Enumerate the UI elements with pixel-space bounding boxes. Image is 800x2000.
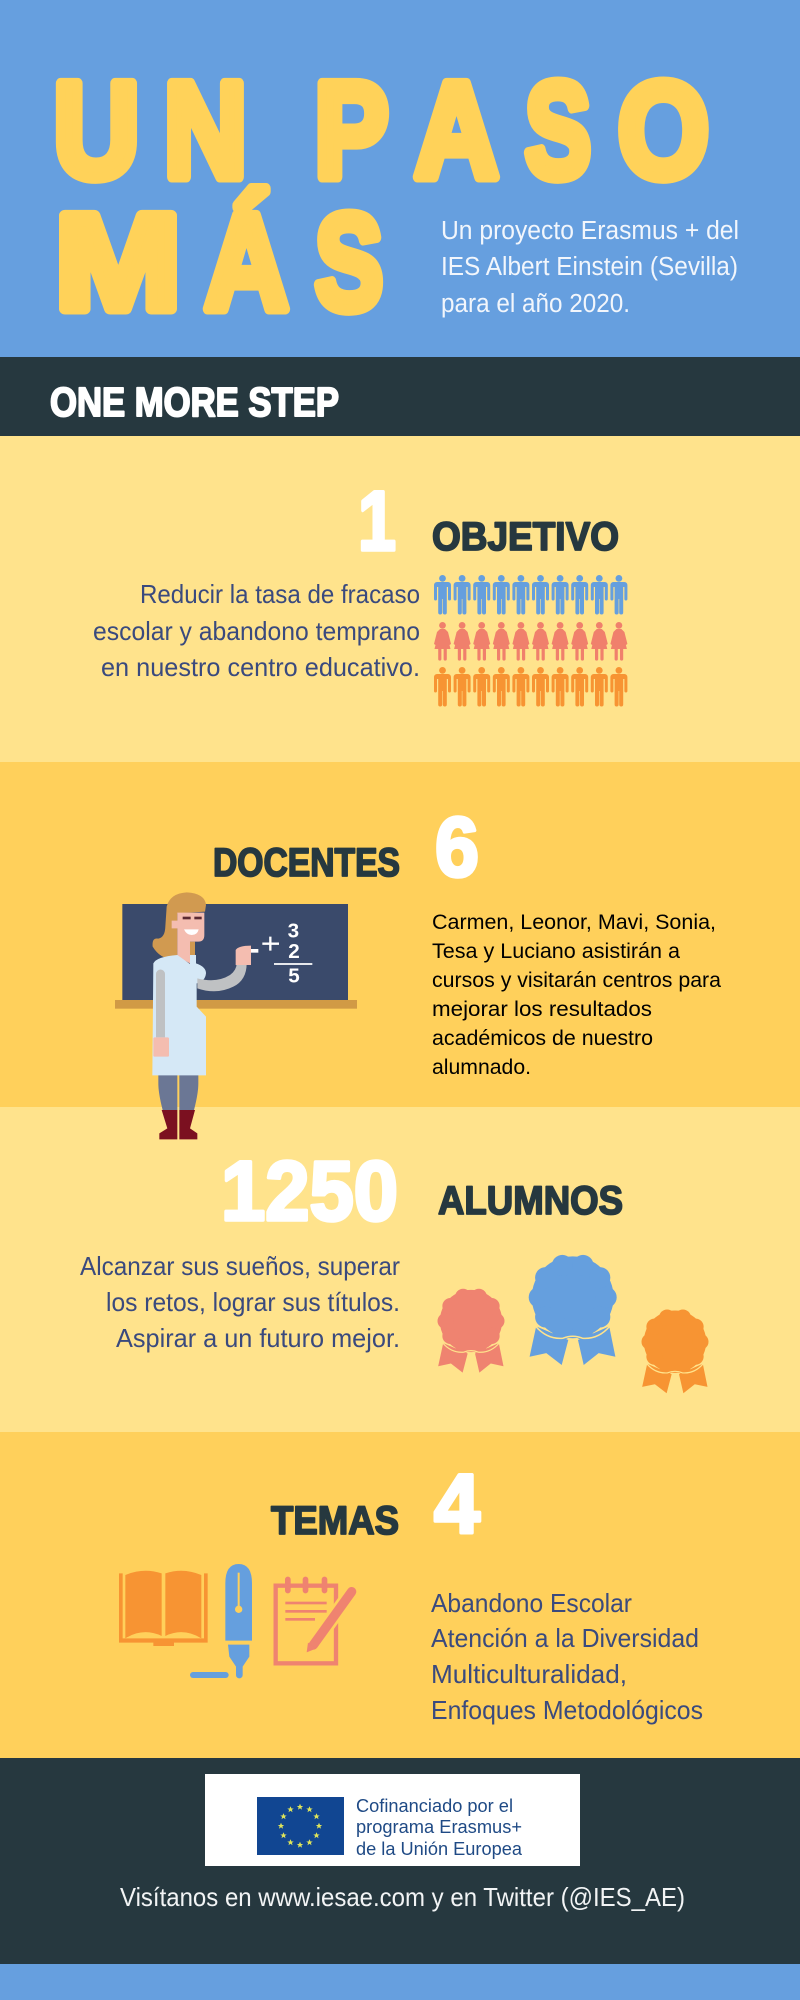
row of men: blue	[434, 575, 627, 614]
project description	[441, 217, 739, 318]
subtitle: one more step: ONE MORE STEP	[50, 379, 339, 425]
number 4: 4	[434, 1457, 480, 1551]
row of men: orange	[434, 667, 627, 706]
blackboard: 5	[288, 965, 300, 988]
temas list: Multiculturalidad,	[431, 1659, 627, 1689]
title: UN PASO MAS: N	[164, 54, 247, 206]
project description: para el año 2020.	[441, 290, 630, 318]
project description: Un proyecto Erasmus + del	[441, 217, 739, 245]
temas list: Abandono Escolar	[431, 1588, 632, 1618]
illustration: teacher at blackboard	[115, 892, 357, 1139]
temas list: Atención a la Diversidad	[431, 1623, 699, 1653]
docentes text: cursos y visitarán centros para	[432, 968, 721, 992]
panel: subtitle band	[0, 357, 800, 436]
icon: notepad and pencil	[276, 1577, 352, 1663]
temas list	[431, 1588, 703, 1725]
footer text: Visítanos en www.iesae.com y en Twitter (@IES_AE)	[120, 1882, 685, 1912]
blackboard	[115, 904, 357, 1009]
row of women: salmon	[434, 622, 627, 661]
objetivo text: Reducir la tasa de fracaso	[140, 579, 420, 609]
panel: docentes	[0, 762, 800, 1107]
heading: objetivo: OBJETIVO	[432, 515, 619, 559]
logo text: Cofinanciado por el	[356, 1795, 513, 1816]
co-funding logo	[205, 1774, 580, 1866]
heading: alumnos: ALUMNOS	[438, 1179, 623, 1223]
EU flag	[257, 1797, 344, 1855]
docentes text: académicos de nuestro	[432, 1026, 653, 1050]
heading: docentes: DOCENTES	[213, 841, 400, 885]
objetivo text	[93, 579, 420, 682]
number 1: 1	[358, 474, 396, 568]
alumnos text	[80, 1251, 400, 1353]
title: UN PASO MAS: M	[55, 186, 181, 338]
blackboard: 3	[288, 919, 299, 942]
logo text: de la Unión Europea	[356, 1838, 523, 1859]
title: UN PASO MAS: P	[314, 54, 388, 206]
icons: rosettes	[438, 1255, 708, 1393]
title: UN PASO MAS: S	[315, 186, 383, 338]
docentes text: Carmen, Leonor, Mavi, Sonia,	[432, 910, 716, 934]
objetivo text: escolar y abandono temprano	[93, 616, 420, 646]
pictogram: people rows	[434, 575, 627, 706]
title: UN PASO MAS: A	[414, 54, 498, 206]
title: UN PASO MAS: U	[54, 54, 140, 206]
panel: temas	[0, 1432, 800, 1758]
teacher figure	[152, 892, 258, 1139]
alumnos text: Aspirar a un futuro mejor.	[116, 1323, 400, 1353]
number 6: 6	[435, 800, 479, 894]
docentes text: Tesa y Luciano asistirán a	[432, 939, 680, 963]
alumnos text: los retos, lograr sus títulos.	[106, 1287, 400, 1317]
bottom band	[0, 1964, 800, 2000]
panel: objetivo	[0, 436, 800, 762]
project description: IES Albert Einstein (Sevilla)	[441, 253, 738, 281]
rosette: salmon	[438, 1289, 504, 1373]
heading: temas: TEMAS	[271, 1499, 399, 1543]
number 1250: 1250	[221, 1144, 398, 1238]
rosette: orange	[642, 1309, 708, 1393]
logo text	[356, 1795, 523, 1859]
icon: open book	[119, 1571, 208, 1646]
panel: footer	[0, 1758, 800, 1964]
docentes text: mejorar los resultados	[432, 997, 652, 1021]
docentes text	[432, 910, 721, 1079]
rosette: blue	[529, 1255, 617, 1365]
blackboard: 2	[288, 940, 300, 963]
panel: header	[0, 0, 800, 357]
title: UN PASO MAS: Á	[204, 186, 288, 338]
title: UN PASO MAS: S	[525, 54, 591, 206]
title: UN PASO MAS	[54, 54, 709, 338]
objetivo text: en nuestro centro educativo.	[101, 652, 420, 682]
docentes text: alumnado.	[432, 1055, 531, 1079]
alumnos text: Alcanzar sus sueños, superar	[80, 1251, 400, 1281]
icons: study items	[119, 1564, 352, 1678]
logo text: programa Erasmus+	[356, 1816, 522, 1837]
temas list: Enfoques Metodológicos	[431, 1695, 703, 1725]
panel: alumnos	[0, 1107, 800, 1432]
icon: fountain pen	[190, 1564, 252, 1678]
title: UN PASO MAS: O	[618, 54, 709, 206]
